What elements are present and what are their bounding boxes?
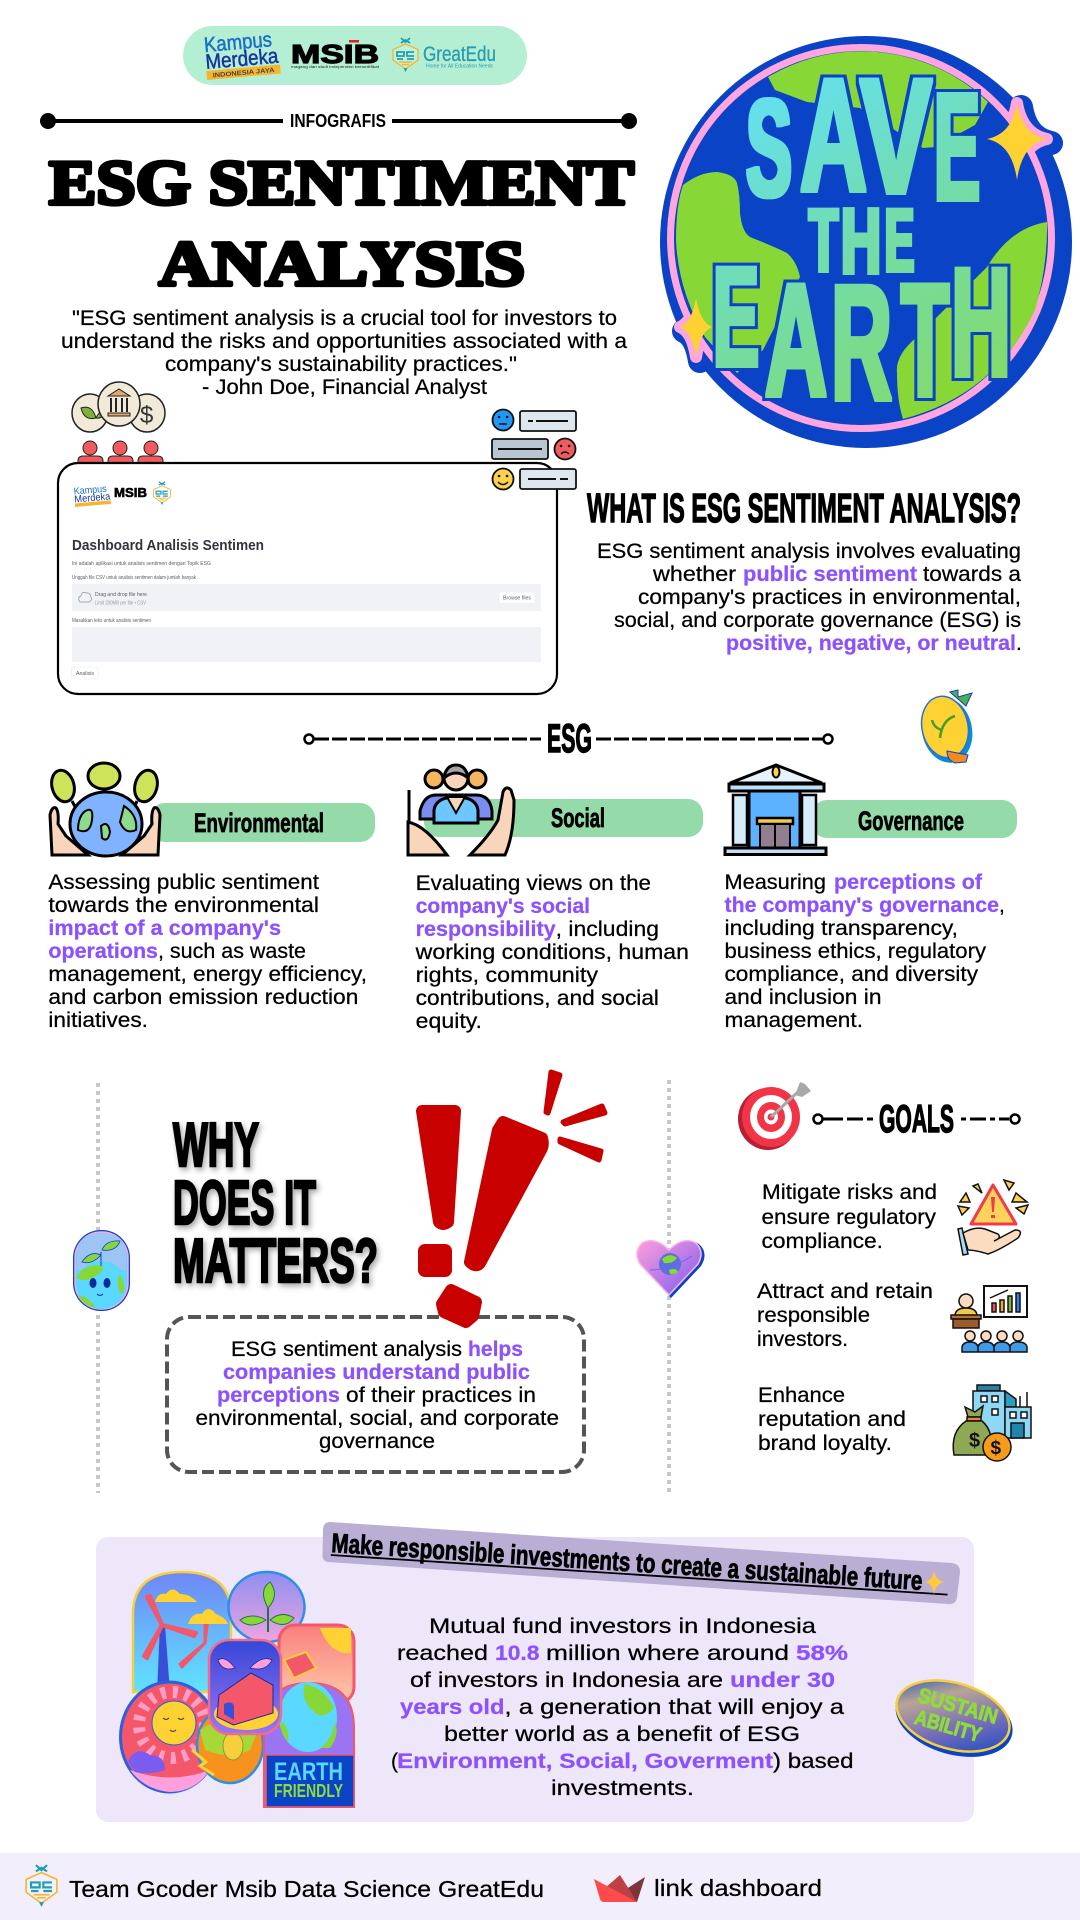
investment statistics text: 58% — [796, 1642, 848, 1665]
governance description: compliance, and diversity — [724, 963, 979, 986]
investment statistics text: million where around — [546, 1642, 789, 1665]
governance description: business ethics, regulatory — [724, 940, 987, 963]
investment statistics text: ( — [391, 1750, 398, 1773]
social description: responsibility — [416, 918, 556, 941]
card heading: Dashboard Analisis Sentimen — [72, 537, 264, 554]
social description: rights, community — [416, 964, 599, 987]
upload box: Limit 200MB per file • CSV — [95, 600, 147, 606]
investment statistics text: Environment, Social, Goverment — [397, 1750, 773, 1773]
investment statistics text: reached — [397, 1642, 488, 1665]
heading: why does it matters — [173, 1111, 378, 1296]
infografis divider: INFOGRAFIS — [290, 111, 386, 131]
social description — [415, 872, 689, 1033]
quote text: "ESG sentiment analysis is a crucial tool for investors to — [72, 307, 617, 330]
logo: GreatEdu: Home for All Education Needs — [426, 64, 494, 70]
ESG definition text: . — [1016, 632, 1022, 655]
sticker: smiling earth sprout — [73, 1230, 130, 1311]
environmental description: operations — [48, 940, 158, 963]
star outlines — [660, 36, 1072, 448]
upload box: Browse files — [503, 596, 532, 602]
goal 3 text — [758, 1384, 906, 1455]
investment statistics text: investments. — [551, 1777, 694, 1800]
ESG section divider — [304, 717, 832, 761]
icon: government building — [725, 765, 826, 854]
environmental description: and carbon emission reduction — [48, 986, 358, 1009]
icon: investors presentation — [951, 1286, 1027, 1352]
footer team text: Team Gcoder Msib Data Science GreatEdu — [69, 1876, 544, 1902]
THE lettering — [809, 189, 914, 293]
governance description: management. — [724, 1009, 863, 1032]
logo: GreatEdu: GreatEdu — [423, 43, 496, 66]
dashed callout box: ESG sentiment analysis — [231, 1338, 462, 1361]
environmental description — [48, 871, 367, 1032]
card logos: Kampus — [73, 484, 107, 498]
investment statistics text — [391, 1615, 854, 1800]
icon: earth friendly sticker collage — [120, 1572, 354, 1807]
earth friendly sticker: FRIENDLY — [274, 1781, 343, 1801]
icon: red exclamation marks — [422, 1072, 605, 1322]
ESG section divider: ESG — [547, 717, 592, 761]
icon: streamlit crown — [594, 1875, 645, 1902]
environmental description: initiatives. — [48, 1009, 148, 1032]
SAVE lettering: A — [800, 45, 867, 226]
card description — [72, 561, 211, 581]
icon: buildings and money bag: $ — [969, 1430, 980, 1452]
windmill sticker — [133, 1572, 231, 1692]
EARTH lettering: E — [713, 238, 759, 397]
governance description: Measuring — [724, 871, 826, 894]
heading: why does it matters: DOES IT — [173, 1169, 316, 1238]
investment statistics text: Mutual fund investors in Indonesia — [429, 1615, 816, 1638]
social description: equity. — [416, 1010, 482, 1033]
icon: target with arrow — [738, 1082, 811, 1150]
footer band — [0, 1853, 1080, 1920]
leaf and lightning sticker — [192, 1707, 263, 1783]
sticker: sustainability: SUSTAIN — [915, 1684, 1000, 1729]
goal 2 text: Attract and retain — [757, 1280, 933, 1303]
pill: environmental: Environmental — [194, 808, 324, 838]
goal 3 text: reputation and — [758, 1408, 906, 1431]
sticker: sustainability — [887, 1668, 1022, 1770]
environmental description: towards the environmental — [48, 894, 319, 917]
quote text: - John Doe, Financial Analyst — [202, 376, 487, 399]
ESG definition text — [597, 540, 1022, 655]
logo: GreatEdu — [393, 38, 496, 72]
goal 3 text: Enhance — [758, 1384, 845, 1407]
footer logo — [26, 1865, 57, 1907]
dashed callout box: environmental, social, and corporate — [196, 1407, 559, 1430]
dashed callout box: perceptions — [217, 1384, 340, 1407]
earth friendly sticker: EARTH — [274, 1758, 343, 1786]
header logo pill — [183, 26, 527, 85]
ESG definition text: towards a — [923, 563, 1021, 586]
globe land — [676, 51, 1047, 419]
social description: Evaluating views on the — [416, 872, 651, 895]
EARTH lettering: H — [951, 236, 1011, 410]
ESG definition text: ESG sentiment analysis involves evaluating — [597, 540, 1021, 563]
sun face sticker — [120, 1682, 218, 1792]
card logos — [73, 482, 171, 507]
ESG definition text: public sentiment — [743, 563, 917, 586]
quote text — [61, 307, 627, 399]
quote text: understand the risks and opportunities associated with a — [61, 330, 627, 353]
heading: why does it matters: WHY — [173, 1111, 259, 1180]
social description: , including — [556, 918, 659, 941]
sticker: heart with planet — [637, 1241, 705, 1298]
governance description — [724, 871, 1005, 1032]
dashboard screenshot card — [58, 463, 557, 694]
EARTH lettering: T — [901, 250, 949, 431]
goals divider — [814, 1098, 1020, 1141]
title: ESG SENTIMENT — [49, 148, 634, 218]
goal 1 text: Mitigate risks and — [762, 1181, 937, 1204]
text area: Masukkan teks untuk analisis sentimen — [72, 618, 151, 624]
THE lettering: T — [809, 190, 838, 290]
icon: risk warning on hand — [958, 1180, 1028, 1255]
ESG definition text: social, and corporate governance (ESG) is — [614, 609, 1021, 632]
THE lettering: H — [841, 189, 881, 293]
dashed callout box — [167, 1317, 584, 1472]
pill: social — [424, 799, 703, 837]
save the earth badge: E — [934, 61, 980, 233]
environmental description: , such as waste — [158, 940, 306, 963]
icon: light bulb — [916, 690, 978, 767]
governance description: including transparency, — [724, 917, 958, 940]
investment statistics text: 10.8 — [495, 1642, 540, 1665]
infografis divider — [40, 111, 637, 131]
environmental description: Assessing public sentiment — [48, 871, 319, 894]
panel: responsible investment — [96, 1537, 1022, 1822]
goal 2 text: responsible — [757, 1304, 870, 1327]
goal 2 text: investors. — [757, 1328, 848, 1351]
logo: Kampus Merdeka: Kampus — [203, 28, 273, 57]
pill: social: Social — [551, 803, 605, 833]
icon: buildings and money bag: $ — [990, 1438, 1002, 1459]
footer link text: link dashboard — [654, 1875, 822, 1901]
save the earth badge: E — [885, 190, 914, 290]
investment statistics text: under 30 — [730, 1669, 835, 1692]
EARTH lettering: A — [765, 250, 827, 431]
icon: hands holding globe — [48, 763, 161, 856]
governance description: perceptions of — [834, 871, 983, 894]
sticker: sustainability: ABILITY — [912, 1706, 984, 1747]
card description: Unggah file CSV untuk analisis sentimen dalam jumlah banyak — [72, 575, 196, 581]
governance description: , — [999, 894, 1005, 917]
social description: working conditions, human — [415, 941, 689, 964]
dashed callout box: helps — [468, 1338, 523, 1361]
pill: environmental — [150, 803, 375, 842]
icon: buildings and money bag — [953, 1385, 1031, 1461]
heading: why does it matters: MATTERS? — [173, 1227, 378, 1296]
logo: MSIB: magang dan studi independen bersertifikat — [291, 64, 380, 69]
quote text: company's sustainability practices." — [165, 353, 517, 376]
icon: sentiment chat bubbles — [492, 410, 576, 490]
logo: MSIB: MSIB — [291, 39, 379, 69]
logo: Kampus Merdeka: INDONESIA JAYA — [212, 67, 275, 79]
upload box — [72, 584, 541, 611]
card description: Ini adalah aplikasi untuk analisis sentimen dengan Topik ESG — [72, 561, 211, 567]
icon: finance circles and people — [72, 382, 165, 464]
SAVE lettering: S — [746, 71, 792, 226]
people — [78, 441, 163, 464]
SAVE lettering — [746, 44, 980, 233]
governance description: the company's governance — [724, 894, 999, 917]
ESG definition text: whether — [652, 563, 736, 586]
sun panel sticker — [279, 1625, 354, 1703]
pill: governance — [812, 800, 1017, 838]
text area: Analisis — [76, 671, 95, 677]
ESG definition text: positive, negative, or neutral — [726, 632, 1016, 655]
goal 2 text — [757, 1280, 933, 1351]
save the earth badge — [660, 36, 1072, 448]
upload box: Drag and drop file here — [95, 592, 147, 598]
dashed callout box: governance — [319, 1430, 435, 1453]
house sticker — [209, 1640, 281, 1734]
logo: Kampus Merdeka — [203, 28, 281, 80]
goal 1 text: ensure regulatory — [762, 1206, 937, 1229]
governance description: and inclusion in — [724, 986, 882, 1009]
EARTH lettering — [713, 236, 1011, 436]
icon: hands holding people — [408, 765, 514, 855]
investment statistics text: years old — [400, 1696, 504, 1719]
pill: governance: Governance — [858, 806, 964, 836]
earth friendly sticker — [264, 1682, 354, 1807]
dashed callout box: companies understand public — [223, 1361, 530, 1384]
card logos: Merdeka — [74, 491, 111, 506]
investment statistics text: ) based — [773, 1750, 854, 1773]
logo: Kampus Merdeka: Merdeka — [205, 45, 280, 74]
environmental description: impact of a company's — [48, 917, 281, 940]
social description: company's social — [416, 895, 590, 918]
ESG definition text: company's practices in environmental, — [638, 586, 1021, 609]
text area — [72, 618, 541, 679]
investment statistics text: of investors in Indonesia are — [410, 1669, 723, 1692]
icon: finance circles and people: $ — [140, 402, 153, 429]
environmental description: management, energy efficiency, — [48, 963, 367, 986]
stars — [680, 103, 1047, 357]
card logos: MSIB — [114, 485, 147, 500]
EARTH lettering: R — [831, 251, 892, 436]
SAVE lettering: V — [860, 44, 932, 228]
investment statistics text: better world as a benefit of ESG — [444, 1723, 800, 1746]
goal 1 text — [762, 1181, 937, 1253]
title: ANALYSIS — [159, 229, 525, 299]
sprout sticker — [228, 1572, 304, 1642]
investment statistics text: , a generation that will enjoy a — [504, 1696, 844, 1719]
dashed callout box: of their practices in — [346, 1384, 536, 1407]
social description: contributions, and social — [416, 987, 659, 1010]
goals divider: GOALS — [879, 1098, 954, 1141]
goal 3 text: brand loyalty. — [758, 1432, 892, 1455]
title — [49, 148, 634, 299]
goal 1 text: compliance. — [762, 1230, 883, 1253]
